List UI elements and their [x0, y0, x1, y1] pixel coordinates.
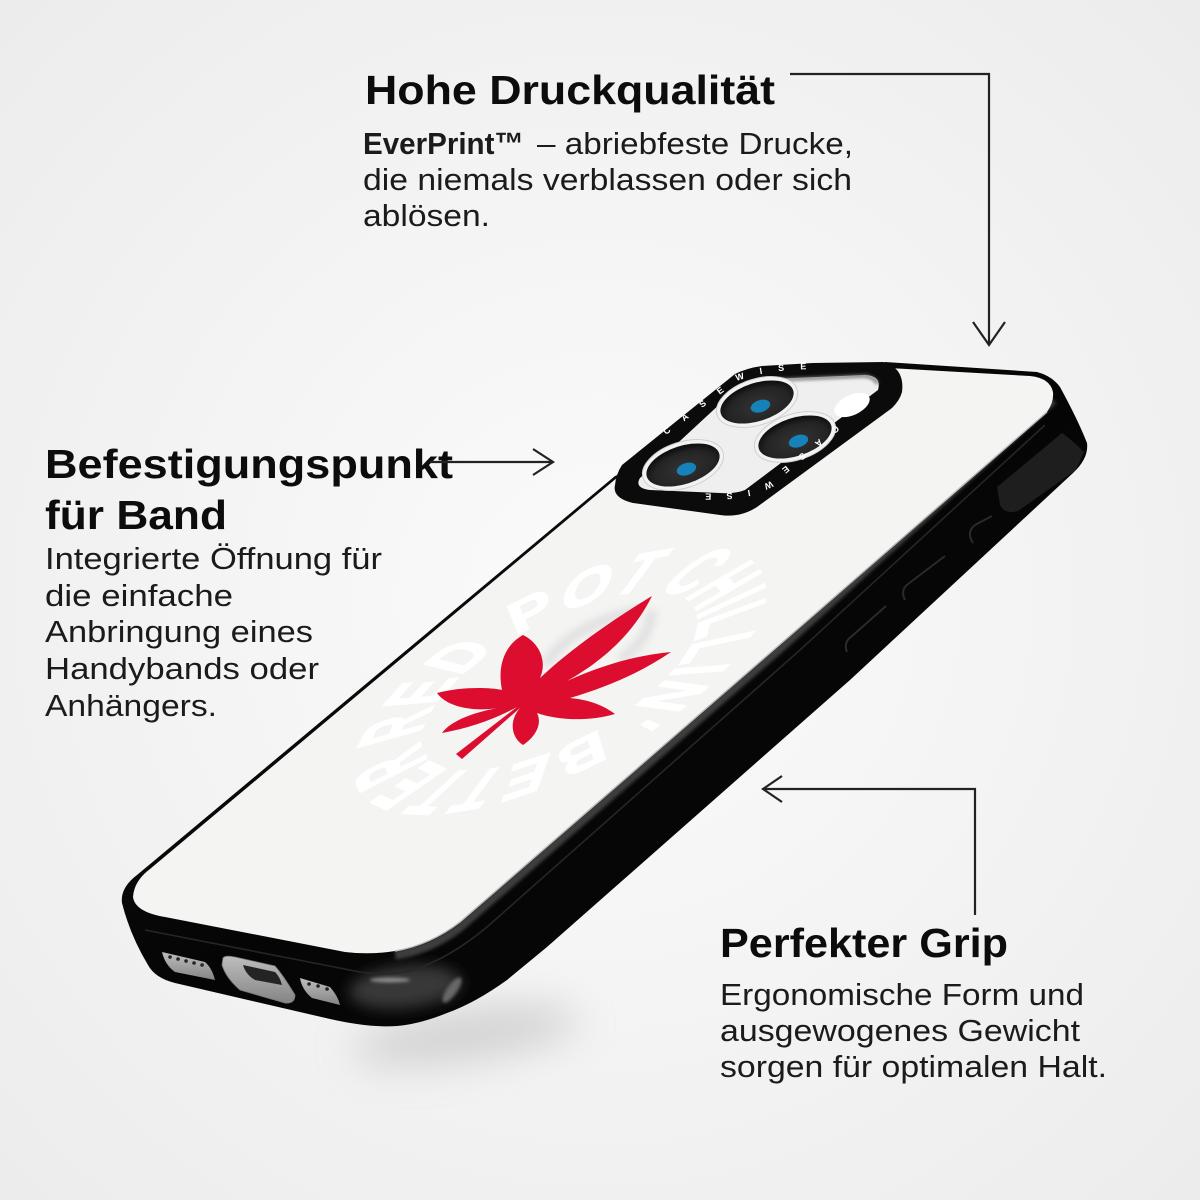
callout: perfect grip [720, 776, 1107, 1084]
camera window [638, 375, 879, 493]
body text [363, 126, 853, 233]
speaker left holes [170, 957, 202, 965]
face edge highlight [395, 412, 1047, 951]
volume button upper [903, 556, 945, 600]
charging port [222, 956, 295, 1003]
side details [145, 400, 1084, 1014]
callout: print quality [363, 67, 1005, 345]
body text: Integrierte Öffnung für [45, 541, 382, 576]
body text: sorgen für optimalen Halt. [720, 1049, 1107, 1084]
red leaf [437, 596, 671, 759]
bottom ports [162, 952, 340, 1005]
body text: ausgewogenes Gewicht [720, 1013, 1080, 1048]
window inner shade [775, 376, 877, 384]
body text: Anhängers. [45, 688, 217, 723]
heading: Befestigungspunkt für Band: Befestigungspunkt [45, 441, 453, 487]
camera frame [615, 362, 902, 516]
arrow to case top [790, 74, 1005, 345]
heading: Hohe Druckqualität: Hohe Druckqualität [365, 67, 775, 113]
brand text bottom: CASEWISE [706, 426, 839, 500]
arrow to case side [763, 776, 975, 915]
side band [395, 400, 1053, 955]
body text: ablösen. [363, 198, 490, 233]
phone shadow [348, 993, 582, 1077]
speaker right holes [309, 984, 327, 989]
gloss streak right [440, 976, 464, 1004]
lens left [636, 430, 730, 500]
speaker left [162, 952, 215, 980]
arrow to attachment point [430, 449, 553, 475]
body text: die niemals verblassen oder sich [363, 162, 852, 197]
flash [831, 388, 873, 422]
phone case [122, 362, 1088, 1026]
lens top [710, 367, 804, 437]
callout: strap attachment [45, 441, 553, 723]
side button [970, 516, 992, 543]
volume button lower [846, 606, 886, 652]
gloss streak left [370, 978, 410, 982]
body text: Handybands oder [45, 651, 319, 686]
camera module [614, 362, 902, 516]
body text: Ergonomische Form und [720, 977, 1084, 1012]
body text: Anbringung eines [45, 614, 313, 649]
glossy corner base [347, 960, 463, 1014]
body text [45, 541, 382, 723]
body text: EverPrint™ [363, 126, 524, 161]
side groove [145, 425, 1045, 974]
heading: Befestigungspunkt für Band: für Band [45, 492, 227, 538]
speaker right [300, 978, 340, 1005]
heading: Befestigungspunkt für Band [45, 441, 453, 538]
body text: die einfache [45, 578, 233, 613]
circular print text: BETTER RED POT CHILLIN' [356, 548, 766, 816]
body text: – abriebfeste Drucke, [537, 126, 853, 161]
side switch panel [997, 433, 1084, 512]
brand text top: CASEWISE [664, 363, 806, 434]
charging port opening [243, 965, 282, 985]
case silhouette [122, 362, 1087, 1026]
lens right [748, 402, 842, 472]
front face [133, 368, 1053, 953]
body text [720, 977, 1107, 1084]
heading: Perfekter Grip: Perfekter Grip [720, 920, 1008, 966]
magnetic ring shadow [545, 610, 652, 665]
